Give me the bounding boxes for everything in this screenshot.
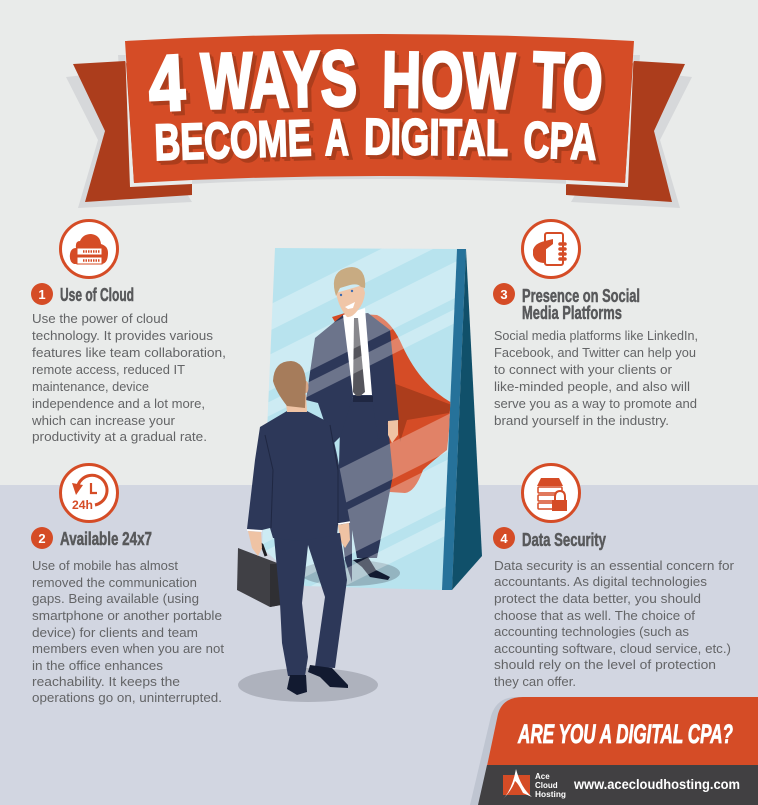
- orange callout: [487, 697, 758, 766]
- badge 4: [493, 527, 515, 549]
- badge 2: [31, 527, 53, 549]
- body text 4: [494, 558, 735, 689]
- dark strip: [478, 765, 758, 805]
- body text 3: [494, 328, 698, 428]
- heading: HOW: [381, 35, 516, 125]
- body text 1: which can increase your: [31, 413, 176, 428]
- body text 2: reachability. It keeps the: [32, 674, 180, 689]
- logo: Cloud: [535, 781, 558, 790]
- man trousers: [274, 533, 347, 676]
- body text 3: like-minded people, and also will: [494, 379, 690, 394]
- icon: cloud server: [60, 220, 118, 278]
- body text 4: accounting technologies (such as: [494, 624, 690, 639]
- reflected tie: [353, 318, 365, 398]
- heading 3: [522, 286, 640, 323]
- body text 1: features like team collaboration,: [32, 345, 226, 360]
- panel: data security: [493, 464, 735, 689]
- heading 4: Data Security: [522, 530, 606, 550]
- man jacket: [247, 411, 350, 541]
- reflected shoes: [353, 557, 390, 580]
- icon: server with padlock: [522, 464, 580, 522]
- body text 2: members even when you are not: [32, 641, 224, 656]
- reflected trousers: [338, 397, 393, 582]
- man shoes: [287, 665, 348, 695]
- logo: Hosting: [535, 790, 566, 799]
- body text 3: Facebook, and Twitter can help you: [494, 345, 696, 360]
- body text 2: device) for clients and team: [32, 625, 198, 640]
- reflection: [262, 248, 456, 586]
- mirror frame: [442, 249, 482, 590]
- call to action footer: [470, 697, 758, 805]
- left ribbon tail: [73, 61, 192, 202]
- body text 4: choose that as well. The choice of: [494, 608, 695, 623]
- body text 1: [31, 311, 226, 444]
- heading 3: Presence on Social: [522, 286, 640, 306]
- heading: CPA: [523, 111, 598, 171]
- body text 4: they can offer.: [494, 674, 576, 689]
- badge 4: 4: [500, 531, 508, 546]
- body text 2: Use of mobile has almost: [32, 558, 178, 573]
- body text 3: Social media platforms like LinkedIn,: [494, 328, 698, 343]
- badge 1: [31, 283, 53, 305]
- body text 4: should rely on the level of protection: [494, 657, 716, 672]
- reflected hand: [388, 420, 398, 443]
- icon: 24h clock: 24h: [72, 498, 93, 512]
- mirror glass: [262, 248, 457, 590]
- banner face: [125, 34, 634, 183]
- body text 3: to connect with your clients or: [494, 362, 673, 377]
- logo: [503, 769, 566, 799]
- body text 2: [32, 558, 224, 705]
- panel: social media: [493, 220, 698, 428]
- reflected shirt: [343, 308, 372, 395]
- heading: TO: [531, 35, 604, 126]
- heading: A: [325, 109, 349, 166]
- mirror light bands: [262, 248, 456, 586]
- panel: use of cloud: [31, 220, 226, 444]
- illustration: mirror and businessman: [237, 210, 482, 702]
- body text 1: independence and a lot more,: [32, 396, 205, 411]
- man neck and head: [273, 361, 308, 412]
- body text 3: serve you as a way to promote and: [494, 396, 697, 411]
- body text 2: in the office enhances: [32, 658, 164, 673]
- right ribbon tail: [566, 61, 685, 202]
- body text 4: accountants. As digital technologies: [494, 574, 708, 589]
- reflected head: [334, 267, 365, 317]
- badge 3: 3: [500, 287, 508, 302]
- badge 1: 1: [38, 287, 46, 302]
- icon: phone in hand: [522, 220, 580, 278]
- badge 3: [493, 283, 515, 305]
- heading 2: Available 24x7: [60, 529, 152, 549]
- hands: [248, 523, 350, 556]
- icon: 24h clock: [60, 464, 118, 522]
- body text 4: accounting software, cloud service, etc.): [494, 641, 731, 656]
- badge 2: 2: [38, 531, 46, 546]
- body text 1: maintenance, device: [32, 379, 149, 394]
- cuffs: [247, 522, 350, 531]
- briefcase: [237, 543, 281, 607]
- body text 2: gaps. Being available (using: [32, 591, 199, 606]
- title banner: [66, 33, 692, 208]
- reflected jacket: [306, 313, 399, 445]
- body text 1: productivity at a gradual rate.: [32, 429, 207, 444]
- body text 3: brand yourself in the industry.: [494, 413, 669, 428]
- panel: available 24x7: [31, 464, 224, 705]
- website url: www.acecloudhosting.com: [573, 776, 740, 792]
- body text 2: removed the communication: [32, 575, 197, 590]
- body text 2: operations go on, uninterrupted.: [32, 690, 222, 705]
- logo: Ace: [535, 772, 550, 781]
- heading: DIGITAL: [364, 108, 508, 167]
- heading: WAYS: [200, 33, 358, 125]
- cape: [332, 313, 450, 493]
- heading: 4: [147, 37, 187, 128]
- body text 1: technology. It provides various: [32, 328, 214, 343]
- heading: [147, 33, 604, 171]
- floor shadow: [238, 668, 378, 702]
- heading: BECOME: [154, 109, 312, 171]
- body text 4: Data security is an essential concern for: [494, 558, 735, 573]
- body text 2: smartphone or another portable: [32, 608, 222, 623]
- body text 1: remote access, reduced IT: [32, 362, 185, 377]
- heading 3: Media Platforms: [522, 303, 622, 323]
- body text 4: protect the data better, you should: [494, 591, 701, 606]
- body text 1: Use the power of cloud: [32, 311, 168, 326]
- heading 1: Use of Cloud: [60, 285, 134, 305]
